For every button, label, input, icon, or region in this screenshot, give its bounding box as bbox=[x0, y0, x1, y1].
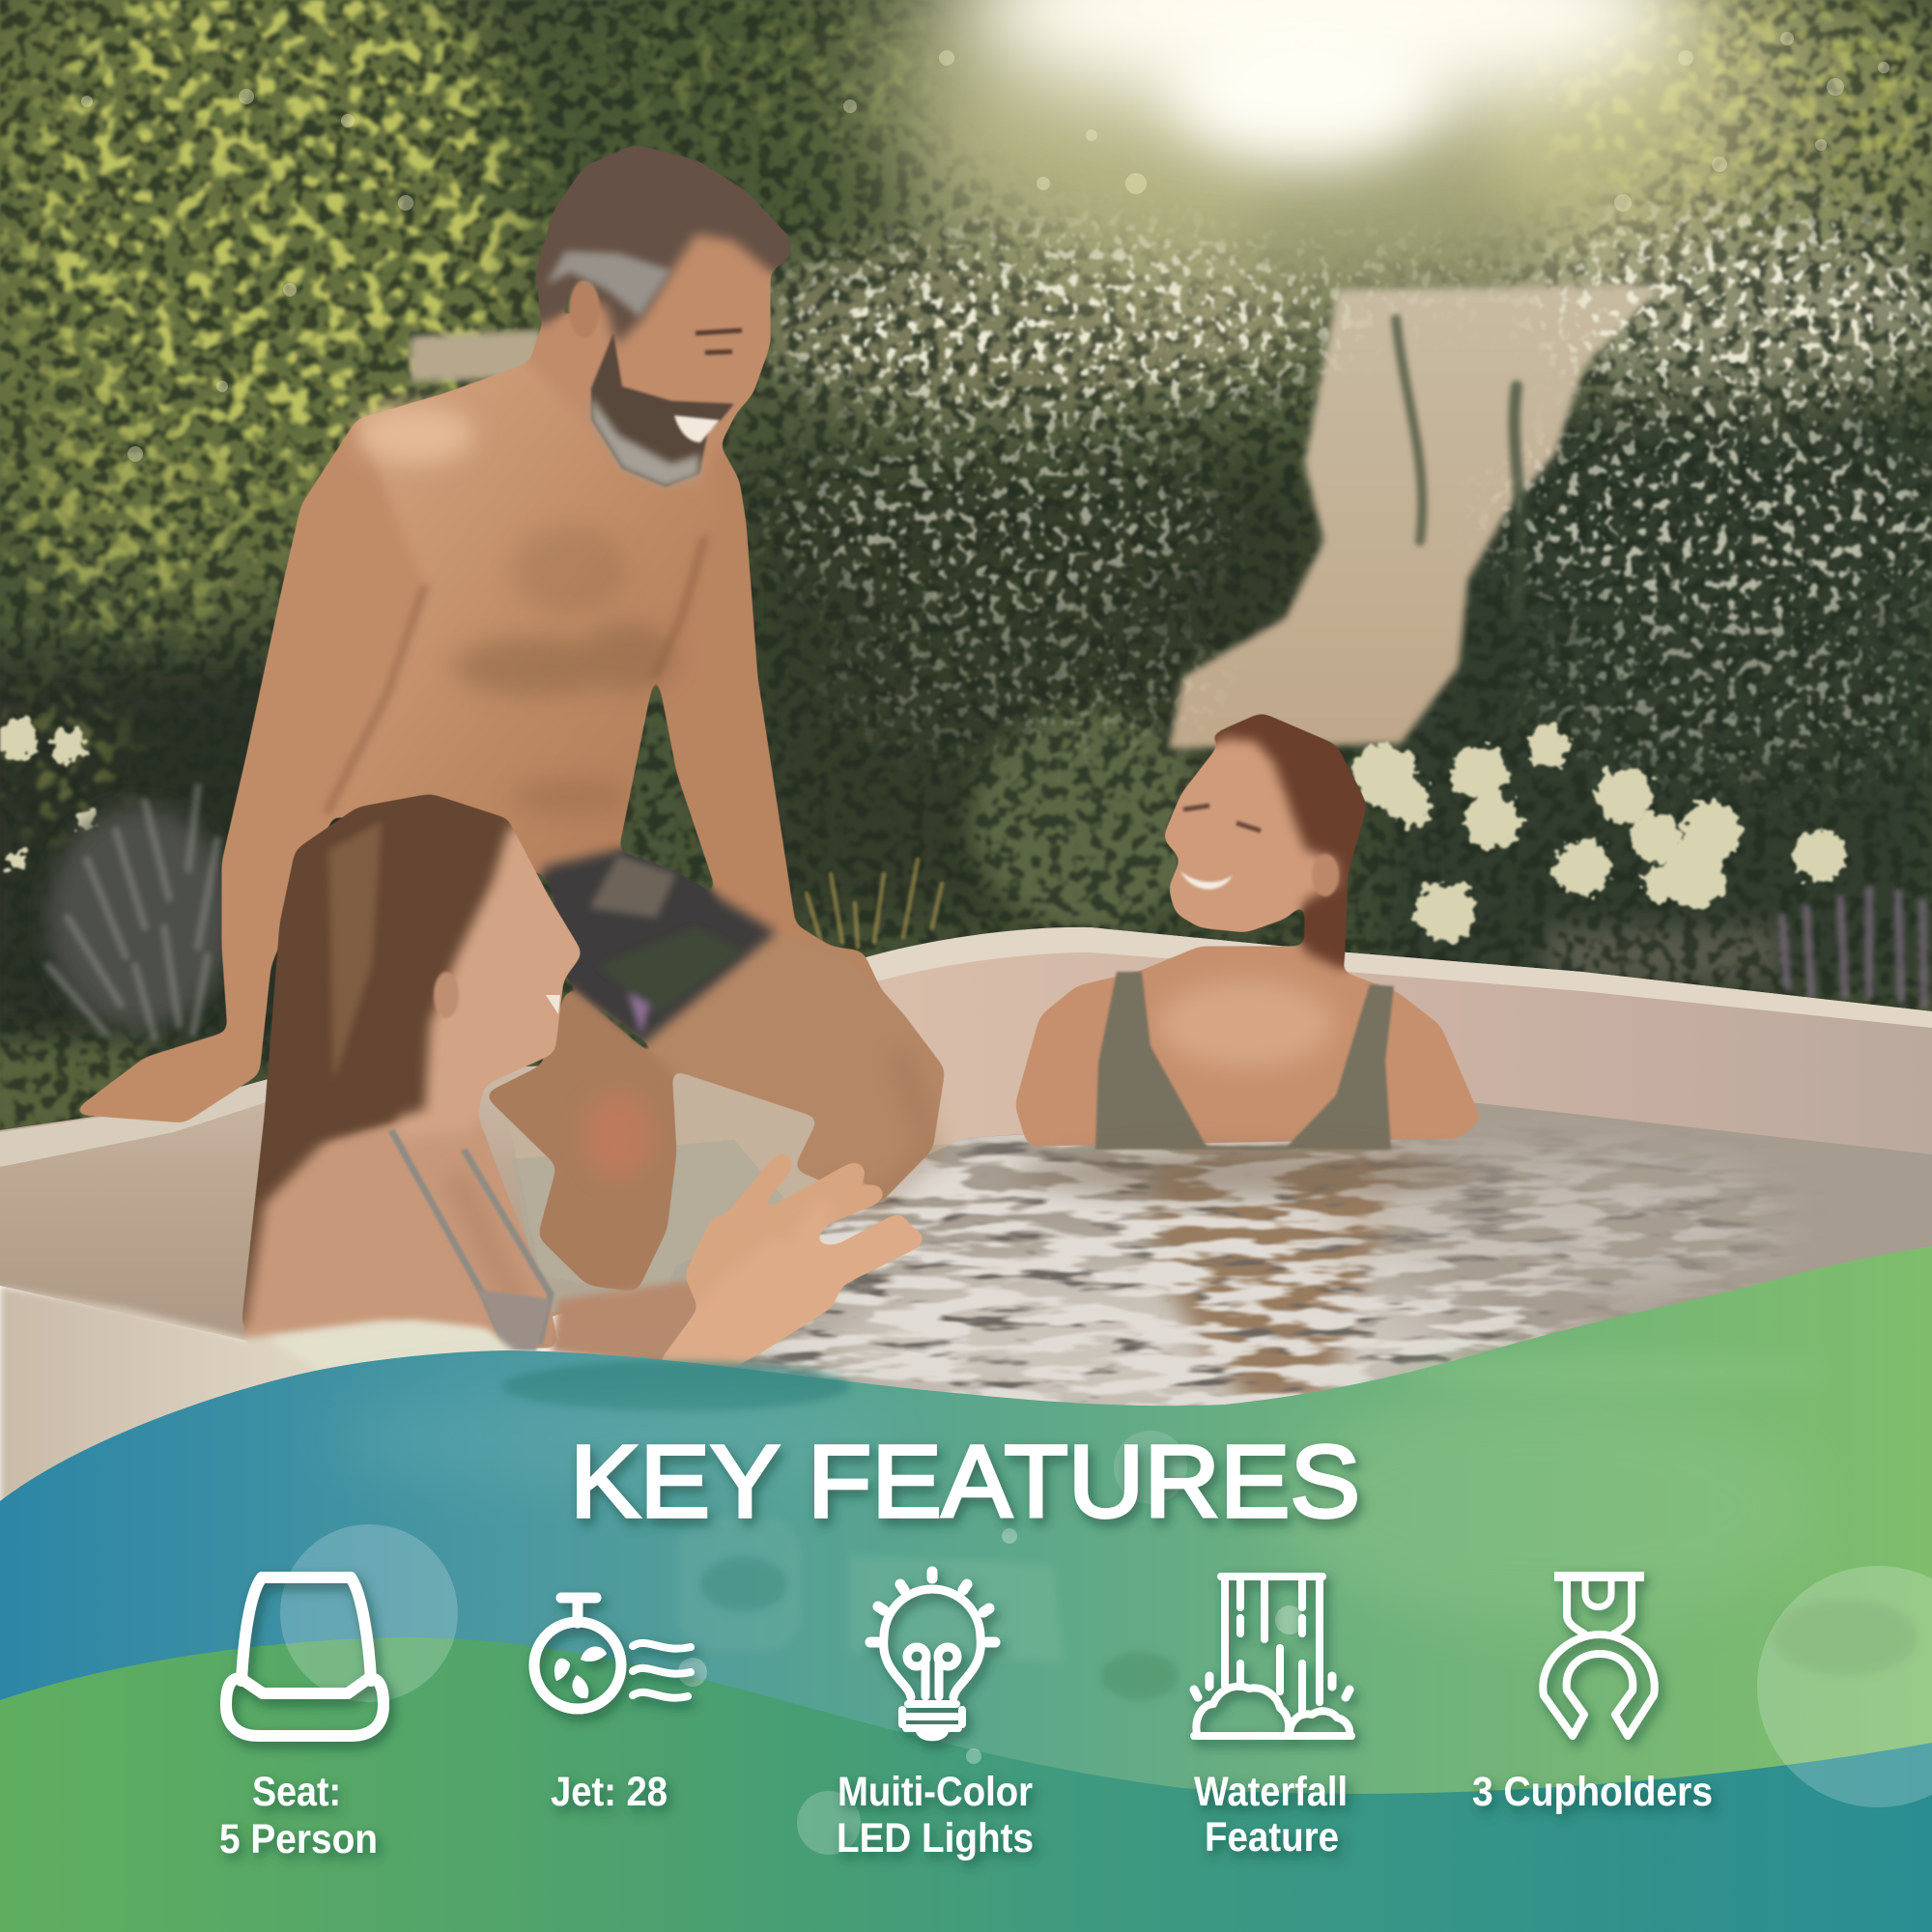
ear bbox=[569, 280, 600, 338]
icon: cupholder bbox=[1543, 1577, 1655, 1736]
feature: cupholders bbox=[1472, 1577, 1713, 1815]
back hand bbox=[688, 1164, 874, 1304]
woman on the right bbox=[1014, 713, 1481, 1199]
label: LED lights bbox=[837, 1769, 1034, 1861]
tub rim highlight bbox=[0, 1077, 275, 1167]
icon: light bulb bbox=[870, 1572, 995, 1739]
left arm bbox=[71, 419, 454, 1122]
neck and face bbox=[529, 234, 770, 493]
flowering hedges bbox=[747, 176, 1932, 805]
hair sheen bbox=[328, 821, 382, 1082]
woman on the left bbox=[242, 794, 582, 1350]
front tub edge and towel bbox=[0, 1286, 522, 1546]
icon: seat bbox=[226, 1577, 384, 1736]
front hand bbox=[662, 1212, 914, 1372]
lower wave band bbox=[0, 1637, 1932, 1932]
body silhouette bbox=[71, 145, 945, 1292]
lavender plants bbox=[48, 787, 1924, 1038]
chest glow bbox=[1159, 980, 1333, 1067]
upper wave band bbox=[0, 1246, 1932, 1932]
label: seat bbox=[219, 1769, 378, 1862]
label: jets: Jet: 28 bbox=[551, 1769, 668, 1815]
shoulder highlight bbox=[357, 406, 473, 464]
feature: waterfall bbox=[1194, 1577, 1351, 1861]
arm shading bbox=[327, 536, 705, 813]
body and head silhouette bbox=[1015, 713, 1481, 1146]
label: LED lights: LED Lights bbox=[837, 1815, 1034, 1861]
fan blades bbox=[554, 1646, 607, 1698]
man sitting on tub edge bbox=[71, 145, 945, 1292]
cream rose clusters bbox=[0, 718, 1845, 943]
knee flush bbox=[583, 1092, 653, 1179]
label: waterfall: Feature bbox=[1205, 1814, 1339, 1861]
hair bbox=[242, 794, 511, 1328]
beard bbox=[591, 333, 734, 487]
waterline shadow bbox=[1014, 1149, 1478, 1199]
icon: waterfall bbox=[1194, 1577, 1351, 1736]
eye and brow bbox=[696, 330, 742, 353]
tub left wall bbox=[0, 1063, 676, 1372]
face and neck bbox=[396, 826, 582, 1140]
feature: seat bbox=[219, 1577, 384, 1862]
grey chin bbox=[591, 396, 699, 487]
left leg bbox=[484, 988, 676, 1292]
bokeh highlights bbox=[81, 32, 1889, 462]
hair bbox=[536, 145, 792, 345]
feature: jets bbox=[534, 1598, 691, 1815]
low bushes and grass bbox=[0, 710, 1777, 1135]
grey temple bbox=[546, 251, 671, 317]
submerged legs bbox=[1150, 1154, 1410, 1410]
bikini straps bbox=[391, 1130, 551, 1350]
panel: key features wave background bbox=[0, 1246, 1932, 1932]
smile bbox=[546, 995, 560, 1014]
label: cupholders: 3 Cupholders bbox=[1472, 1769, 1713, 1815]
submerged forearm bbox=[551, 1280, 720, 1368]
swimsuit bbox=[1095, 972, 1394, 1150]
shorts bbox=[542, 850, 777, 1040]
tub back wall and rim bbox=[850, 927, 1932, 1208]
garden wall bbox=[411, 285, 1662, 749]
sunlight glare bbox=[869, 0, 1797, 319]
right leg bbox=[647, 932, 945, 1205]
water bbox=[512, 1103, 1932, 1406]
garden foliage backdrop bbox=[0, 0, 1932, 1256]
label: waterfall: Waterfall bbox=[1194, 1769, 1348, 1815]
back shading bbox=[454, 1174, 541, 1348]
shoulders and chest bbox=[246, 1108, 558, 1348]
inner tub wall near man bbox=[502, 1063, 1014, 1299]
eyes and smile bbox=[1180, 806, 1339, 896]
ear and earring bbox=[434, 972, 459, 1018]
chest hair bbox=[454, 526, 676, 816]
knee shadow bbox=[831, 1053, 932, 1205]
label: waterfall bbox=[1194, 1769, 1348, 1861]
torso bbox=[327, 363, 720, 874]
bokeh lights bbox=[280, 1431, 1932, 1855]
clapping hands bbox=[662, 1164, 914, 1372]
submerged shadows and tub details bbox=[328, 1354, 1918, 1700]
photo: hot tub garden scene bbox=[0, 0, 1932, 1546]
label: LED lights: Muiti-Color bbox=[838, 1769, 1033, 1815]
feature: LED lights bbox=[837, 1572, 1034, 1861]
label: seat: Seat: bbox=[252, 1769, 341, 1815]
title: KEY FEATURES bbox=[570, 1425, 1360, 1539]
right arm bbox=[659, 425, 881, 990]
icon: jet fan bbox=[534, 1598, 691, 1709]
smile bbox=[674, 415, 720, 442]
shorts pattern bbox=[589, 855, 744, 1036]
label: seat: 5 Person bbox=[219, 1816, 378, 1862]
man's details bbox=[327, 251, 932, 1205]
